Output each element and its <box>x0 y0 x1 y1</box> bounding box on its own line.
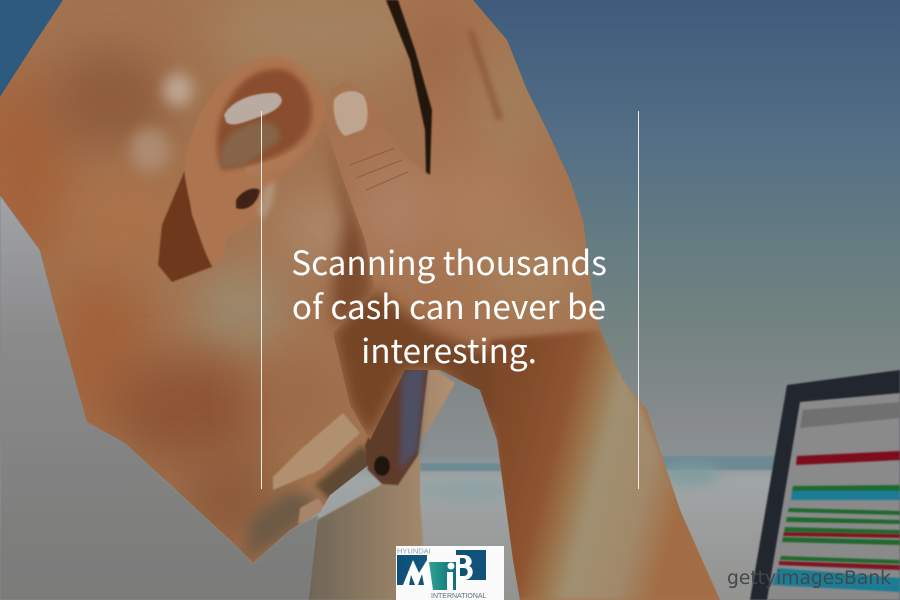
skin shadow beside thumb <box>325 125 372 330</box>
headline: Scanning thousands <box>291 236 607 285</box>
laptop <box>750 370 900 600</box>
far arm behind face <box>308 365 455 600</box>
right vertical rule <box>638 111 639 489</box>
left vertical rule <box>261 111 262 489</box>
ear <box>184 56 325 268</box>
lip <box>298 498 326 524</box>
ear shadow <box>158 165 214 282</box>
gap between fingers <box>386 0 432 175</box>
watermark: gettyimagesBank <box>727 568 891 589</box>
head and face <box>0 0 440 600</box>
hand and forearm <box>320 0 730 600</box>
cheek highlight <box>273 413 360 490</box>
shirt <box>0 195 318 600</box>
logo: Hyundai MIB International <box>396 546 504 600</box>
headline: interesting. <box>361 324 537 373</box>
moustache <box>314 444 368 500</box>
thumb nail <box>334 91 368 136</box>
headline: of cash can never be <box>292 280 606 329</box>
logo: Hyundai MIB International: INTERNATIONAL <box>431 593 487 600</box>
logo: Hyundai MIB International: HYUNDAI <box>397 546 431 556</box>
headline <box>291 236 607 373</box>
nose <box>365 355 428 485</box>
